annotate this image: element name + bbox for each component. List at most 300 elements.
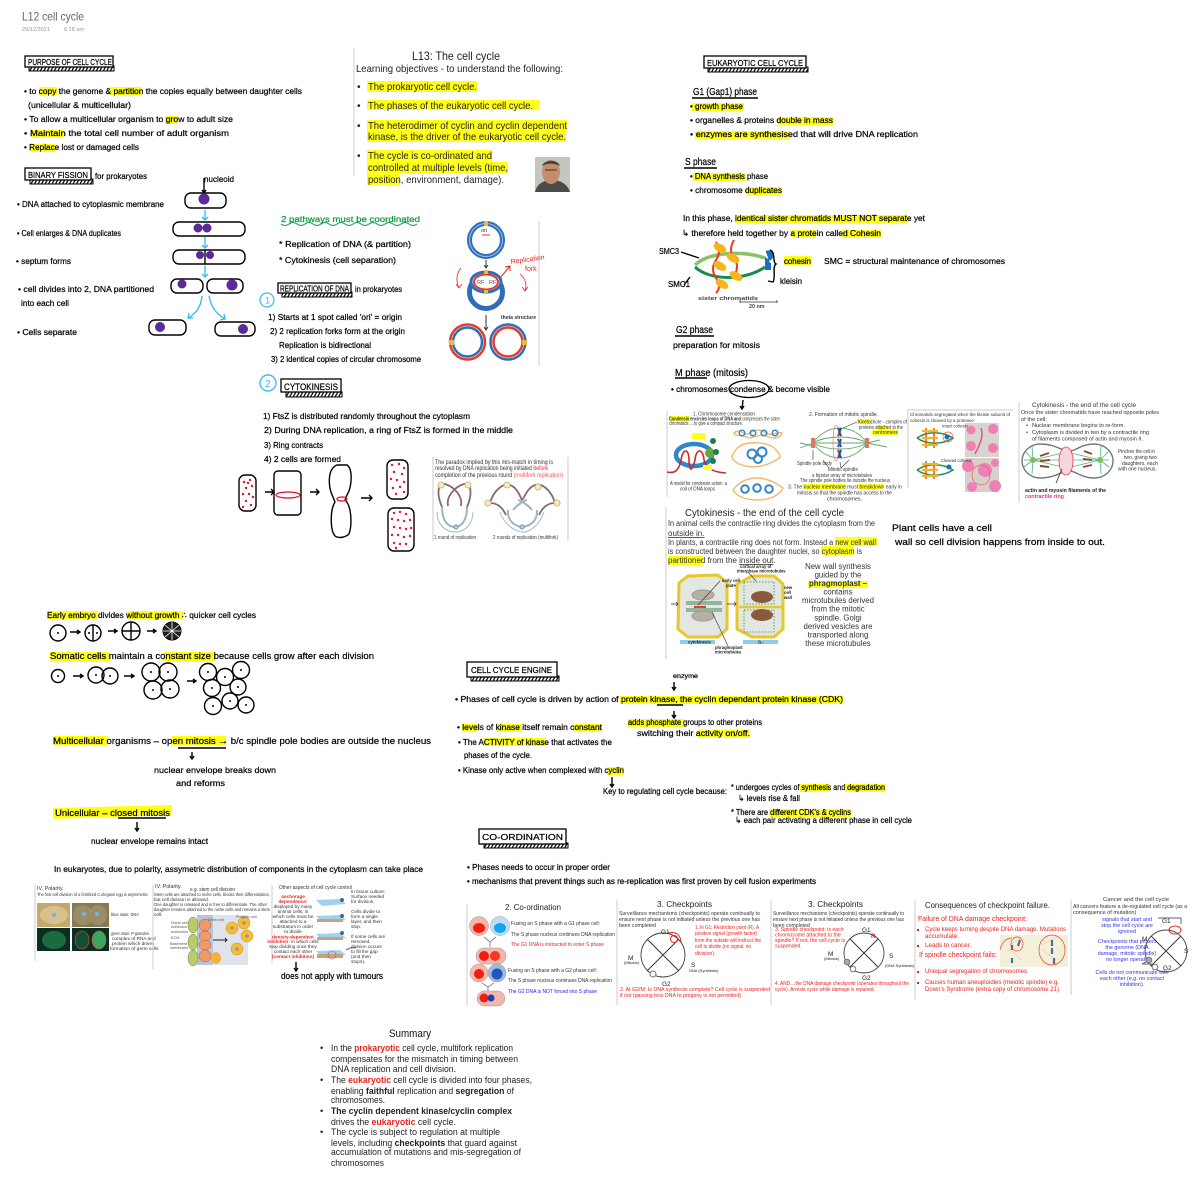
panel: open and closed mitosis: Multicellular organisms – open mitosis → b/c spindle pole bodies are outside the nucleus bbox=[53, 736, 431, 747]
panel: eukaryotic cell cycle phases: S phase bbox=[685, 157, 716, 168]
panel: cytokinesis animal: Nuclear membrane begins to re-form. bbox=[1032, 423, 1125, 429]
page title: L12 cell cycle bbox=[22, 10, 84, 24]
panel: checkpoints slide 2: 3. Spindle checkpoint: is each bbox=[775, 927, 844, 933]
panel: multifork replication paradox: 1 round of replication bbox=[434, 535, 476, 541]
panel: checkpoints slide 2: ensure next phase is not initiated unless the previous one has bbox=[773, 917, 904, 923]
panel: L13 learning objectives: • bbox=[357, 101, 361, 112]
panel: checkpoints slide 2: 4. AND....the DNA damage checkpoint (operates throughout the bbox=[775, 981, 909, 987]
diagram: theta replication: RF bbox=[489, 280, 497, 286]
diagram: theta replication: RF bbox=[477, 280, 485, 286]
panel: consequences of checkpoint failure: Leads to cancer. bbox=[925, 942, 971, 949]
panel: consequences of checkpoint failure: Cycle keeps turning despite DNA damage. Mutations bbox=[925, 926, 1066, 933]
panel: plant cytokinesis: phragmoplast – bbox=[809, 579, 868, 588]
panel: mitotic spindle: 3. The nuclear membrane must breakdown early in bbox=[788, 484, 902, 490]
panel: cancer and the cell cycle: G2 bbox=[1163, 965, 1172, 972]
panel: cytokinesis bbox=[239, 375, 513, 551]
panel: other aspects of cell cycle control: animal cells, in bbox=[278, 909, 309, 914]
panel: plant cytokinesis: cortical array of bbox=[740, 564, 772, 569]
panel: checkpoints slide 2 bbox=[771, 900, 915, 1005]
summary: • bbox=[320, 1042, 323, 1053]
panel: polarity stem cell: IV. Polarity. bbox=[155, 884, 182, 890]
panel: polarity stem cell: One daughter is released and is free to differentiate. The other bbox=[154, 902, 267, 907]
panel: plant cytokinesis: contains bbox=[823, 588, 853, 596]
panel: cytokinesis animal: two, giving two bbox=[1124, 455, 1157, 461]
panel: cell cycle engine: adds phosphate groups to other proteins bbox=[628, 717, 762, 727]
panel: replication of DNA: Replication is bidirectional bbox=[279, 340, 371, 350]
panel: checkpoints slide 1: Surveillance mechanisms (checkpoints) operate continually to bbox=[619, 911, 760, 917]
panel: replication of DNA: 2) 2 replication forks form at the origin bbox=[270, 326, 405, 336]
diagram: spindle bbox=[800, 422, 887, 468]
panel: mitotic spindle: chromosomes. bbox=[827, 496, 862, 502]
panel: checkpoints slide 2: M bbox=[828, 951, 833, 958]
panel: open and closed mitosis: In eukaryotes, due to polarity, assymetric distribution of components in the cytoplasm can take place bbox=[54, 864, 423, 874]
panel: L13 learning objectives bbox=[354, 48, 570, 192]
panel: cell cycle engine: * There are different CDK's & cyclins bbox=[731, 807, 851, 817]
panel: binary fission: • Cells separate bbox=[17, 327, 77, 337]
panel: cytokinesis animal: daughters, each bbox=[1122, 461, 1158, 467]
panel: other aspects of cell cycle control: to fill the gap bbox=[351, 949, 378, 954]
panel: L13 learning objectives: • bbox=[357, 121, 361, 132]
panel: eukaryotic cell cycle phases: • chromosome duplicates bbox=[690, 185, 782, 195]
diagram: theta replication: ori bbox=[481, 228, 487, 234]
summary: The cyclin dependent kinase/cyclin complex bbox=[331, 1105, 513, 1116]
summary: compensates for the mismatch in timing between bbox=[331, 1053, 518, 1064]
panel: other aspects of cell cycle control: removed, bbox=[351, 939, 371, 944]
panel: plant cytokinesis: G₁ bbox=[758, 640, 763, 644]
diagram: FtsZ ring division bbox=[239, 460, 414, 551]
panel: other aspects of cell cycle control: (contact inhibition) bbox=[272, 954, 315, 959]
panel: polarity stem cell: e.g. stem cell division bbox=[190, 887, 235, 893]
icon: number 1 bbox=[260, 293, 274, 307]
summary: enabling faithful replication and segregation of bbox=[331, 1085, 514, 1096]
panel: cytokinesis animal: with one nucleus. bbox=[1118, 466, 1157, 472]
summary: The cycle is subject to regulation at multiple bbox=[331, 1126, 500, 1137]
panel: two pathways: 2 pathways must be coordinated bbox=[281, 214, 420, 224]
panel: embryo and somatic cells bbox=[47, 610, 374, 714]
panel: checkpoints slide 2: (Mitosis) bbox=[824, 956, 840, 961]
panel: other aspects of cell cycle control: Other aspects of cell cycle control bbox=[279, 885, 352, 891]
panel: cancer and the cell cycle: stop the cell cycle are bbox=[1101, 923, 1153, 929]
panel: other aspects of cell cycle control: substratum in order bbox=[273, 924, 314, 929]
heading: binary fission bbox=[25, 168, 93, 184]
diagram: condensed DNA blobs bbox=[732, 430, 783, 500]
panel: consequences of checkpoint failure: Failure of DNA damage checkpoint: bbox=[918, 916, 1027, 923]
panel: chromosome condensation: 1. Chromosome condensation bbox=[693, 412, 755, 418]
panel: checkpoints slide 1: division). bbox=[695, 951, 715, 957]
panel: co-ordination: • Phases needs to occur in proper order bbox=[467, 862, 610, 872]
panel: other aspects of cell cycle control: Cells divide to bbox=[351, 909, 381, 914]
panel: other aspects of cell cycle control: layer, and then bbox=[351, 919, 382, 924]
panel: checkpoints slide 2: 3. Checkpoints bbox=[808, 900, 863, 909]
panel: mitotic spindle: proteins attached to the bbox=[859, 425, 903, 431]
panel: open and closed mitosis: nuclear envelope breaks down bbox=[154, 765, 276, 775]
summary: • bbox=[320, 1126, 323, 1137]
panel: plant cytokinesis: derived vesicles are bbox=[804, 622, 872, 631]
summary: • bbox=[320, 1074, 323, 1085]
panel: co-ordination: • mechanisms that prevent things such as re-replication was first proven by cell fusion experiments bbox=[467, 876, 816, 886]
panel: 2. co-ordination slide: The S phase nucleus continues DNA replication bbox=[511, 932, 615, 938]
panel: plant cytokinesis: interphase microtubules bbox=[737, 568, 786, 574]
diagram: cohesin complex: SMC3 bbox=[659, 246, 679, 256]
panel: plant cytokinesis: early cell bbox=[722, 578, 740, 583]
panel: open and closed mitosis: Unicellular – closed mitosis bbox=[55, 808, 170, 819]
diagram: cell cycle wheel bbox=[641, 932, 685, 977]
heading: cytokinesis: CYTOKINESIS bbox=[284, 382, 338, 393]
panel: other aspects of cell cycle control: attached to a bbox=[279, 919, 307, 924]
heading: eukaryotic cell cycle: EUKARYOTIC CELL CYCLE bbox=[707, 58, 803, 68]
panel: cancer and the cell cycle: S bbox=[1184, 948, 1189, 955]
panel: cancer and the cell cycle: signals that start and bbox=[1102, 917, 1152, 923]
panel: plant cytokinesis: transported along bbox=[808, 630, 868, 640]
panel: plant cytokinesis: microtubules derived bbox=[802, 596, 874, 605]
panel: plant cytokinesis: cell bbox=[784, 590, 791, 595]
panel: L13 learning objectives: The heterodimer of cyclin and cyclin dependent bbox=[368, 121, 567, 132]
panel: embryo and somatic cells: Early embryo divides without growth ∴ quicker cell cycles bbox=[47, 610, 256, 620]
panel: cancer and the cell cycle: M bbox=[1142, 936, 1147, 943]
panel: polarity stem cell: Stem cells are attached to niche cells, blocks their differentiation, bbox=[154, 892, 270, 897]
panel: checkpoints slide 2: S bbox=[889, 953, 894, 960]
diagram: stem cell niche: Stem cell bbox=[208, 918, 224, 922]
panel: chromosome condensation: Condensin encircles loops of DNA and compresses the sister bbox=[669, 416, 780, 422]
panel: cytokinesis animal: Cytoplasm is divided in two by a contractile ring bbox=[1032, 430, 1149, 436]
panel: cell cycle engine: phases of the cycle. bbox=[464, 750, 532, 760]
panel: cancer and the cell cycle: each other (e.g. no contact bbox=[1100, 976, 1165, 982]
panel: eukaryotic cell cycle phases: • organelles & proteins double in mass bbox=[690, 115, 833, 125]
icon: number 1: 1 bbox=[265, 296, 270, 306]
panel: plant cytokinesis: from the mitotic bbox=[811, 604, 865, 614]
diagram: two rounds of replication bbox=[485, 482, 560, 532]
panel: two pathways: * Replication of DNA (& partition) bbox=[279, 239, 411, 249]
diagram: cohesin complex: cohesin bbox=[784, 256, 811, 266]
panel: consequences of checkpoint failure: Down’s Syndrome (extra copy of chromosome 21) bbox=[925, 986, 1059, 993]
heading: replication of DNA: REPLICATION OF DNA bbox=[280, 284, 349, 294]
note: plant cells: wall so cell division happens from inside to out. bbox=[894, 537, 1105, 548]
diagram: cohesin complex bbox=[659, 240, 1005, 310]
panel: other aspects of cell cycle control: stop. bbox=[351, 924, 361, 929]
panel: other aspects of cell cycle control: (and then bbox=[351, 954, 371, 959]
panel: replication of DNA: in prokaryotes bbox=[355, 284, 402, 294]
diagram: dividing bacteria bbox=[149, 193, 255, 336]
panel: mitotic spindle: mitosis so that the spindle has access to the bbox=[797, 490, 892, 496]
panel: cancer and the cell cycle: no longer operate bbox=[1106, 957, 1148, 963]
panel: mitotic spindle: 2. Formation of mitotic spindle. bbox=[809, 412, 878, 418]
page title bbox=[22, 10, 85, 33]
diagram: stem cell niche bbox=[170, 915, 257, 966]
panel: plant cytokinesis: Cytokinesis - the end of the cell cycle bbox=[685, 508, 844, 519]
heading: co-ordination bbox=[479, 829, 568, 848]
panel: co-ordination bbox=[467, 829, 816, 886]
panel: other aspects of cell cycle control: to divide bbox=[284, 929, 302, 934]
panel: cancer and the cell cycle: Checkpoints that protect bbox=[1098, 939, 1157, 945]
panel: other aspects of cell cycle control: does not apply with tumours bbox=[281, 971, 383, 982]
panel: cytokinesis: 1) FtsZ is distributed randomly throughout the cytoplasm bbox=[263, 411, 470, 421]
heading: binary fission: BINARY FISSION bbox=[28, 170, 88, 180]
panel: L13 learning objectives: The phases of the eukaryotic cell cycle. bbox=[368, 101, 533, 112]
panel: mitotic spindle: Spindle pole body bbox=[797, 461, 832, 467]
panel: cell cycle engine: * undergoes cycles of synthesis and degradation bbox=[731, 782, 885, 792]
panel: L13 learning objectives: The cycle is co-ordinated and bbox=[368, 151, 492, 162]
diagram: cell culture steps bbox=[316, 898, 356, 959]
panel: checkpoints slide 1: 2. At G2/M: Is DNA synthesis complete? Cell cycle is suspended bbox=[620, 987, 770, 993]
panel: plant cytokinesis: these microtubules bbox=[805, 639, 871, 648]
panel: open and closed mitosis bbox=[53, 736, 431, 874]
panel: polarity C. elegans: complex of RNA and bbox=[112, 936, 156, 942]
heading: cytokinesis bbox=[281, 379, 342, 397]
panel: binary fission: nucleoid bbox=[204, 174, 234, 184]
panel: multifork replication paradox: completion of the previous round (multifork replication) bbox=[435, 472, 563, 479]
panel: checkpoints slide 1: 3. Checkpoints bbox=[657, 900, 712, 909]
heading: replication of DNA bbox=[278, 283, 352, 297]
panel: polarity stem cell: but cell division is allowed. bbox=[154, 897, 209, 902]
panel: eukaryotic cell cycle phases: • enzymes are synthesised that will drive DNA replication bbox=[690, 129, 918, 139]
panel: checkpoints slide 1 bbox=[617, 900, 770, 1005]
panel: plant cytokinesis: guided by the bbox=[815, 570, 861, 580]
summary: chromosomes. bbox=[331, 1094, 385, 1105]
panel: other aspects of cell cycle control: dependence: bbox=[279, 899, 308, 904]
panel: replication of DNA bbox=[260, 283, 421, 364]
diagram: cell fusion bbox=[470, 916, 510, 1006]
panel: checkpoints slide 2: R bbox=[871, 934, 876, 940]
summary: In the prokaryotic cell cycle, multifork replication bbox=[331, 1042, 513, 1053]
panel: checkpoints slide 1: if not (passing less DNA to progeny is not permitted) bbox=[620, 993, 741, 999]
micrographs: C. elegans embryos bbox=[37, 903, 109, 951]
diagram: cell cycle wheel cancer bbox=[1142, 918, 1187, 972]
panel: cytokinesis: 3) Ring contracts bbox=[264, 440, 323, 450]
panel: cancer and the cell cycle: consequence of mutation) bbox=[1073, 910, 1136, 916]
panel: cell cycle engine bbox=[455, 662, 912, 825]
panel: checkpoints slide 1: M bbox=[628, 955, 633, 962]
panel: plant cytokinesis: cytokinesis bbox=[688, 640, 711, 644]
panel: G2 and M phase bbox=[671, 325, 830, 409]
diagram: embryo division bbox=[50, 622, 181, 641]
panel: other aspects of cell cycle control: contact each other bbox=[274, 949, 313, 954]
panel: cancer and the cell cycle: damage, mitotic spindle) bbox=[1098, 951, 1156, 957]
panel: consequences of checkpoint failure: Consequences of checkpoint failure. bbox=[925, 901, 1050, 910]
panel: 2. co-ordination slide: The S phase nucleus continues DNA replication bbox=[508, 978, 612, 984]
icon: lecturer photo bbox=[535, 157, 570, 192]
panel: purpose of cell cycle bbox=[24, 56, 302, 152]
panel: G2 and M phase: G2 phase bbox=[676, 325, 713, 336]
panel: other aspects of cell cycle control: anchorage bbox=[281, 894, 305, 899]
diagram: aneuploid spindle bbox=[1000, 935, 1068, 967]
panel: other aspects of cell cycle control: In tissue culture: bbox=[351, 889, 385, 894]
panel: binary fission: • DNA attached to cytoplasmic membrane bbox=[17, 199, 164, 209]
panel: eukaryotic cell cycle phases: ↳ therefore held together by a protein called Cohesin bbox=[682, 228, 881, 238]
panel: cancer and the cell cycle: All cancers feature a de-regulated cell cycle (as a bbox=[1073, 904, 1188, 910]
panel: binary fission: • cell divides into 2, DNA partitioned bbox=[18, 284, 154, 294]
panel: chromatid segregation bbox=[908, 410, 1013, 492]
panel: cytokinesis animal: • bbox=[1026, 423, 1028, 429]
panel: mitotic spindle: a bipolar array of microtubules bbox=[812, 473, 872, 479]
panel: checkpoints slide 2: Surveillance mechanisms (checkpoints) operate continually to bbox=[773, 911, 904, 917]
panel: chromatid segregation: cohesin is cleaved by a protease: bbox=[910, 418, 975, 424]
panel: checkpoints slide 2: chromosome attached to the bbox=[775, 932, 841, 938]
panel: cytokinesis animal: of the cell: bbox=[1021, 417, 1047, 423]
panel: checkpoints slide 1: (Mitosis) bbox=[624, 960, 640, 965]
panel: plant cytokinesis: In animal cells the contractile ring divides the cytoplasm from the bbox=[668, 519, 875, 528]
diagram: one round of replication bbox=[437, 482, 473, 532]
panel: cancer and the cell cycle: Cells do not communicate with bbox=[1095, 970, 1169, 976]
summary: chromosomes bbox=[331, 1157, 384, 1168]
panel: plant cytokinesis: plate bbox=[726, 583, 736, 588]
diagram: theta replication: theta structure bbox=[501, 315, 536, 321]
panel: checkpoints slide 2: (DNA Synthesis) bbox=[885, 963, 915, 968]
panel: 2. co-ordination slide: Fusing an S phase with a G2 phase cell: bbox=[508, 968, 597, 974]
panel: cancer and the cell cycle: G1 bbox=[1162, 918, 1171, 925]
summary bbox=[320, 1028, 532, 1168]
panel: polarity stem cell bbox=[153, 884, 270, 969]
panel: cytokinesis animal: Once the sister chromatids have reached opposite poles bbox=[1021, 410, 1159, 416]
panel: chromosome condensation: A model for condensin action: a bbox=[670, 481, 727, 487]
panel: cytokinesis animal bbox=[1019, 402, 1159, 503]
diagram: cohesin complex: kleisin bbox=[780, 276, 802, 286]
icon: number 2 bbox=[260, 375, 276, 391]
panel: multifork replication paradox: resolved by DNA replication being initiated before bbox=[435, 465, 548, 472]
diagram: stem cell niche: Basement bbox=[170, 942, 188, 946]
heading: eukaryotic cell cycle bbox=[704, 56, 808, 72]
summary: The eukaryotic cell cycle is divided into four phases, bbox=[331, 1074, 532, 1085]
diagram: cell cycle wheel 2 bbox=[844, 933, 884, 973]
page title: 6:18 am bbox=[64, 27, 85, 33]
summary: accumulation of mutations and mis-segregation of bbox=[331, 1146, 521, 1157]
panel: cytokinesis: 2) During DNA replication, a ring of FtsZ is formed in the middle bbox=[264, 425, 513, 435]
panel: checkpoints slide 1: DNA (Synthesis) bbox=[689, 968, 719, 973]
summary: Summary bbox=[389, 1028, 431, 1040]
panel: mitotic spindle: centromere bbox=[873, 430, 899, 436]
panel: cell cycle engine: • levels of kinase itself remain constant bbox=[457, 722, 603, 732]
panel: G2 and M phase: M phase (mitosis) bbox=[675, 368, 748, 379]
panel: binary fission bbox=[16, 168, 255, 337]
panel: plant cytokinesis: new bbox=[784, 585, 793, 590]
panel: 2. co-ordination slide: 2. Co-ordination bbox=[505, 903, 561, 912]
panel: plant cytokinesis: phragmoplast bbox=[715, 645, 743, 650]
panel: consequences of checkpoint failure: Causes human aneuploidies (meiotic spindle) e.g. bbox=[925, 979, 1059, 986]
panel: other aspects of cell cycle control: density-dependent bbox=[272, 934, 314, 940]
panel: polarity stem cell: cell. bbox=[154, 912, 162, 917]
summary: • bbox=[320, 1105, 323, 1116]
panel: cytokinesis animal: Cytokinesis - the end of the cell cycle bbox=[1032, 402, 1136, 409]
panel: other aspects of cell cycle control bbox=[267, 885, 386, 982]
panel: polarity C. elegans: The first cell division of a fertilized C.elegans egg is asymmetric bbox=[37, 892, 148, 898]
diagram: theta replication bbox=[449, 221, 545, 366]
panel: cell cycle engine: • Phases of cell cycle is driven by action of protein kinase, the cyclin dependant protein kinase (CDK) bbox=[455, 694, 843, 704]
panel: other aspects of cell cycle control: division occurs bbox=[351, 944, 382, 949]
panel: binary fission: • Cell enlarges & DNA duplicates bbox=[17, 228, 121, 238]
panel: checkpoints slide 1: been completed bbox=[619, 923, 656, 929]
panel: cytokinesis animal: • bbox=[1026, 430, 1028, 436]
panel: L13 learning objectives: controlled at multiple levels (time, bbox=[368, 163, 508, 174]
panel: polarity C. elegans: protein which drives bbox=[112, 941, 155, 947]
diagram: cohesin before and after bbox=[917, 428, 953, 479]
panel: polarity C. elegans: blue stain: DNA bbox=[111, 912, 140, 918]
panel: eukaryotic cell cycle phases: • growth phase bbox=[690, 101, 743, 111]
panel: cytokinesis animal: of filaments composed of actin and myosin II. bbox=[1032, 436, 1143, 442]
diagram: cohesin complex: SMC1 bbox=[668, 279, 690, 289]
panel: eukaryotic cell cycle phases: In this phase, identical sister chromatids MUST NOT separate yet bbox=[683, 213, 926, 223]
panel: polarity stem cell: daughter remains attached to the niche cells and remains a stem bbox=[154, 907, 270, 912]
panel: cancer and the cell cycle bbox=[1071, 897, 1189, 995]
heading: purpose of cell cycle: PURPOSE OF CELL CYCLE bbox=[28, 57, 112, 67]
panel: multifork replication paradox bbox=[433, 457, 568, 541]
panel: mitotic spindle: Mitotic spindle bbox=[828, 467, 858, 473]
panel: purpose of cell cycle: • to copy the genome & partition the copies equally between daughter cells bbox=[24, 86, 302, 96]
panel: L13 learning objectives: The prokaryotic cell cycle. bbox=[368, 82, 477, 93]
panel: other aspects of cell cycle control: which cells must be bbox=[273, 914, 314, 919]
panel: other aspects of cell cycle control: stop dividing once they bbox=[269, 944, 317, 949]
panel: multifork replication paradox: 2 rounds of replication (multifork) bbox=[493, 535, 558, 541]
panel: 2. co-ordination slide bbox=[467, 903, 615, 1006]
panel: cell cycle engine: • Kinase only active when complexed with cyclin bbox=[458, 765, 624, 775]
panel: plant cytokinesis: New wall synthesis bbox=[805, 562, 871, 571]
panel: checkpoints slide 2: G2 bbox=[862, 975, 871, 982]
panel: polarity C. elegans bbox=[35, 885, 159, 961]
panel: polarity C. elegans: green stain: P-granules bbox=[111, 931, 149, 937]
panel: mitotic spindle bbox=[788, 412, 908, 502]
summary: drives the eukaryotic cell cycle. bbox=[331, 1116, 456, 1127]
panel: embryo and somatic cells: Somatic cells maintain a constant size because cells grow after each division bbox=[50, 651, 374, 662]
panel: polarity C. elegans: IV. Polarity. bbox=[37, 886, 64, 892]
diagram: stem cell niche: molecules bbox=[171, 930, 188, 934]
panel: plant cytokinesis: outside in. bbox=[668, 529, 704, 538]
diagram: stem cell niche: Niche cell bbox=[171, 921, 188, 925]
panel: purpose of cell cycle: • To allow a multicellular organism to grow to adult size bbox=[24, 114, 233, 124]
panel: plant cytokinesis: is constructed between the daughter nuclei, so cytoplasm is bbox=[668, 547, 862, 556]
panel: plant cytokinesis: partitioned from the inside out. bbox=[668, 556, 776, 565]
panel: chromosome condensation: coil of DNA loops bbox=[680, 486, 715, 492]
diagram: somatic cell growth bbox=[52, 662, 254, 714]
panel: two pathways bbox=[279, 214, 420, 265]
panel: cell cycle engine: switching their activity on/off. bbox=[637, 728, 750, 738]
panel: two pathways: * Cytokinesis (cell separation) bbox=[279, 255, 396, 265]
note: plant cells: Plant cells have a cell bbox=[892, 523, 992, 534]
panel: cell cycle engine: ↳ each pair activating a different phase in cell cycle bbox=[735, 815, 912, 825]
panel: G2 and M phase: preparation for mitosis bbox=[673, 340, 760, 350]
panel: binary fission: • septum forms bbox=[16, 256, 71, 266]
diagram: stem cell niche: ECM bbox=[171, 936, 179, 940]
panel: open and closed mitosis: nuclear envelope remains intact bbox=[91, 836, 209, 846]
panel: checkpoints slide 1: 1. In G1: Restriction point (R). A bbox=[695, 925, 759, 931]
panel: consequences of checkpoint failure: If spindle checkpoint fails: bbox=[919, 952, 997, 959]
panel: plant cytokinesis: spindle. Golgi bbox=[814, 614, 862, 622]
panel: checkpoints slide 2: G1 bbox=[862, 927, 871, 934]
panel: plant cytokinesis: microtubules bbox=[715, 650, 742, 654]
panel: other aspects of cell cycle control: displayed by many bbox=[274, 904, 313, 909]
panel: binary fission: into each cell bbox=[21, 298, 69, 308]
panel: checkpoints slide 2: been completed bbox=[773, 923, 810, 929]
panel: checkpoints slide 1: from the outside will instruct the bbox=[695, 938, 761, 944]
panel: eukaryotic cell cycle phases: • DNA synthesis phase bbox=[690, 171, 768, 181]
panel: L13 learning objectives: position, environment, damage). bbox=[368, 175, 504, 186]
heading: purpose of cell cycle bbox=[25, 56, 114, 71]
heading: co-ordination: CO-ORDINATION bbox=[482, 832, 563, 842]
panel: open and closed mitosis: and reforms bbox=[176, 778, 225, 788]
panel: cell cycle engine: ↳ levels rise & fall bbox=[738, 793, 800, 803]
panel: other aspects of cell cycle control: stops). bbox=[351, 959, 365, 964]
diagram: stem cell niche: Progeny cell bbox=[236, 915, 257, 919]
panel: eukaryotic cell cycle phases: G1 (Gap1) phase bbox=[693, 87, 757, 98]
panel: checkpoints slide 1: positive signal (growth factor) bbox=[695, 931, 757, 937]
panel: checkpoints slide 2: cycle). Arrests cycle while damage is repaired. bbox=[775, 987, 875, 993]
panel: checkpoints slide 1: G2 bbox=[662, 981, 671, 988]
panel: consequences of checkpoint failure: accumulate. bbox=[925, 933, 959, 940]
icon: number 2: 2 bbox=[265, 379, 271, 390]
panel: L13 learning objectives: Learning objectives - to understand the following: bbox=[356, 64, 563, 75]
panel: other aspects of cell cycle control: inhibition: in which cells bbox=[267, 939, 319, 944]
panel: chromosome condensation: chromatids ... to give a compact structure. bbox=[669, 421, 743, 427]
panel: cell cycle engine: Key to regulating cell cycle because: bbox=[603, 786, 727, 796]
diagram: cohesin complex: SMC = structural maintenance of chromosomes bbox=[824, 256, 1005, 266]
panel: other aspects of cell cycle control: for division. bbox=[351, 899, 375, 904]
